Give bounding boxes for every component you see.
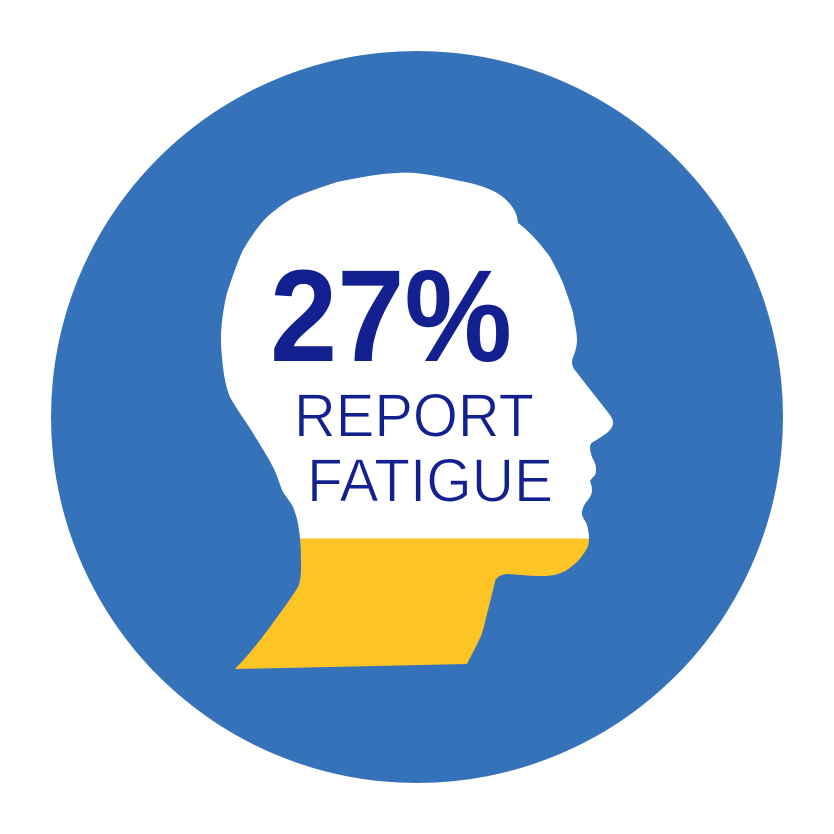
head fill: yellow portion	[235, 538, 589, 669]
label: FATIGUE: FATIGUE	[307, 446, 553, 514]
statistic: 27%: 27%	[270, 242, 512, 389]
blue circle background	[51, 51, 783, 783]
head fill: white portion	[221, 172, 613, 538]
infographic: fatigue statistic	[51, 51, 783, 783]
head silhouette	[221, 172, 613, 669]
label: REPORT: REPORT	[294, 381, 534, 449]
